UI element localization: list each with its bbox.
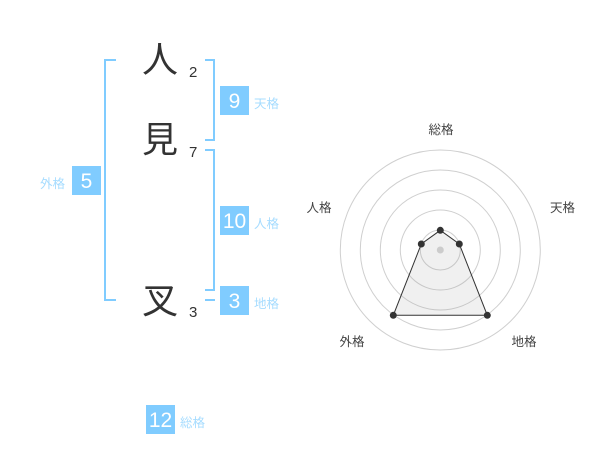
stroke count: 3: 3 xyxy=(189,304,197,321)
stroke count: 2: 2 xyxy=(189,64,197,81)
radar data polygon xyxy=(393,230,487,315)
radar axis labels: 総格 xyxy=(428,122,454,137)
radar grid rings xyxy=(340,150,540,350)
radar data points xyxy=(390,227,491,319)
label: 天格: 天格 xyxy=(254,97,279,111)
kanji: 人: 人 xyxy=(142,39,178,80)
value box: 人格 10: 10 xyxy=(223,210,246,233)
value box: 総格 12 xyxy=(146,405,175,434)
value box: 天格 9 xyxy=(220,86,249,115)
right bracket: person xyxy=(205,149,215,291)
label: 人格: 人格 xyxy=(254,217,279,231)
right bracket: heaven xyxy=(205,59,215,141)
value box: 地格 3: 3 xyxy=(229,290,240,313)
value box: 天格 9: 9 xyxy=(229,90,240,113)
kanji: 見: 見 xyxy=(142,119,178,160)
kanji: 叉: 叉 xyxy=(142,280,178,321)
value box: 人格 10 xyxy=(220,206,249,235)
radar center dot xyxy=(437,246,444,254)
value box: 外格 5 xyxy=(72,166,101,195)
stroke count: 7: 7 xyxy=(189,144,197,161)
label: 総格: 総格 xyxy=(180,416,205,430)
value box: 地格 3 xyxy=(220,286,249,315)
value box: 外格 5: 5 xyxy=(81,170,92,193)
label: 地格: 地格 xyxy=(254,297,279,311)
value box: 総格 12: 12 xyxy=(149,409,172,432)
left bracket: outer xyxy=(104,59,116,301)
label: 外格: 外格 xyxy=(40,177,65,191)
radar axis labels: 外格 xyxy=(339,334,365,349)
tick: earth xyxy=(205,299,215,301)
radar axis labels: 天格 xyxy=(550,200,575,215)
radar axis labels: 人格 xyxy=(306,200,332,215)
radar axis labels xyxy=(306,122,575,349)
radar axis labels: 地格 xyxy=(511,334,537,349)
